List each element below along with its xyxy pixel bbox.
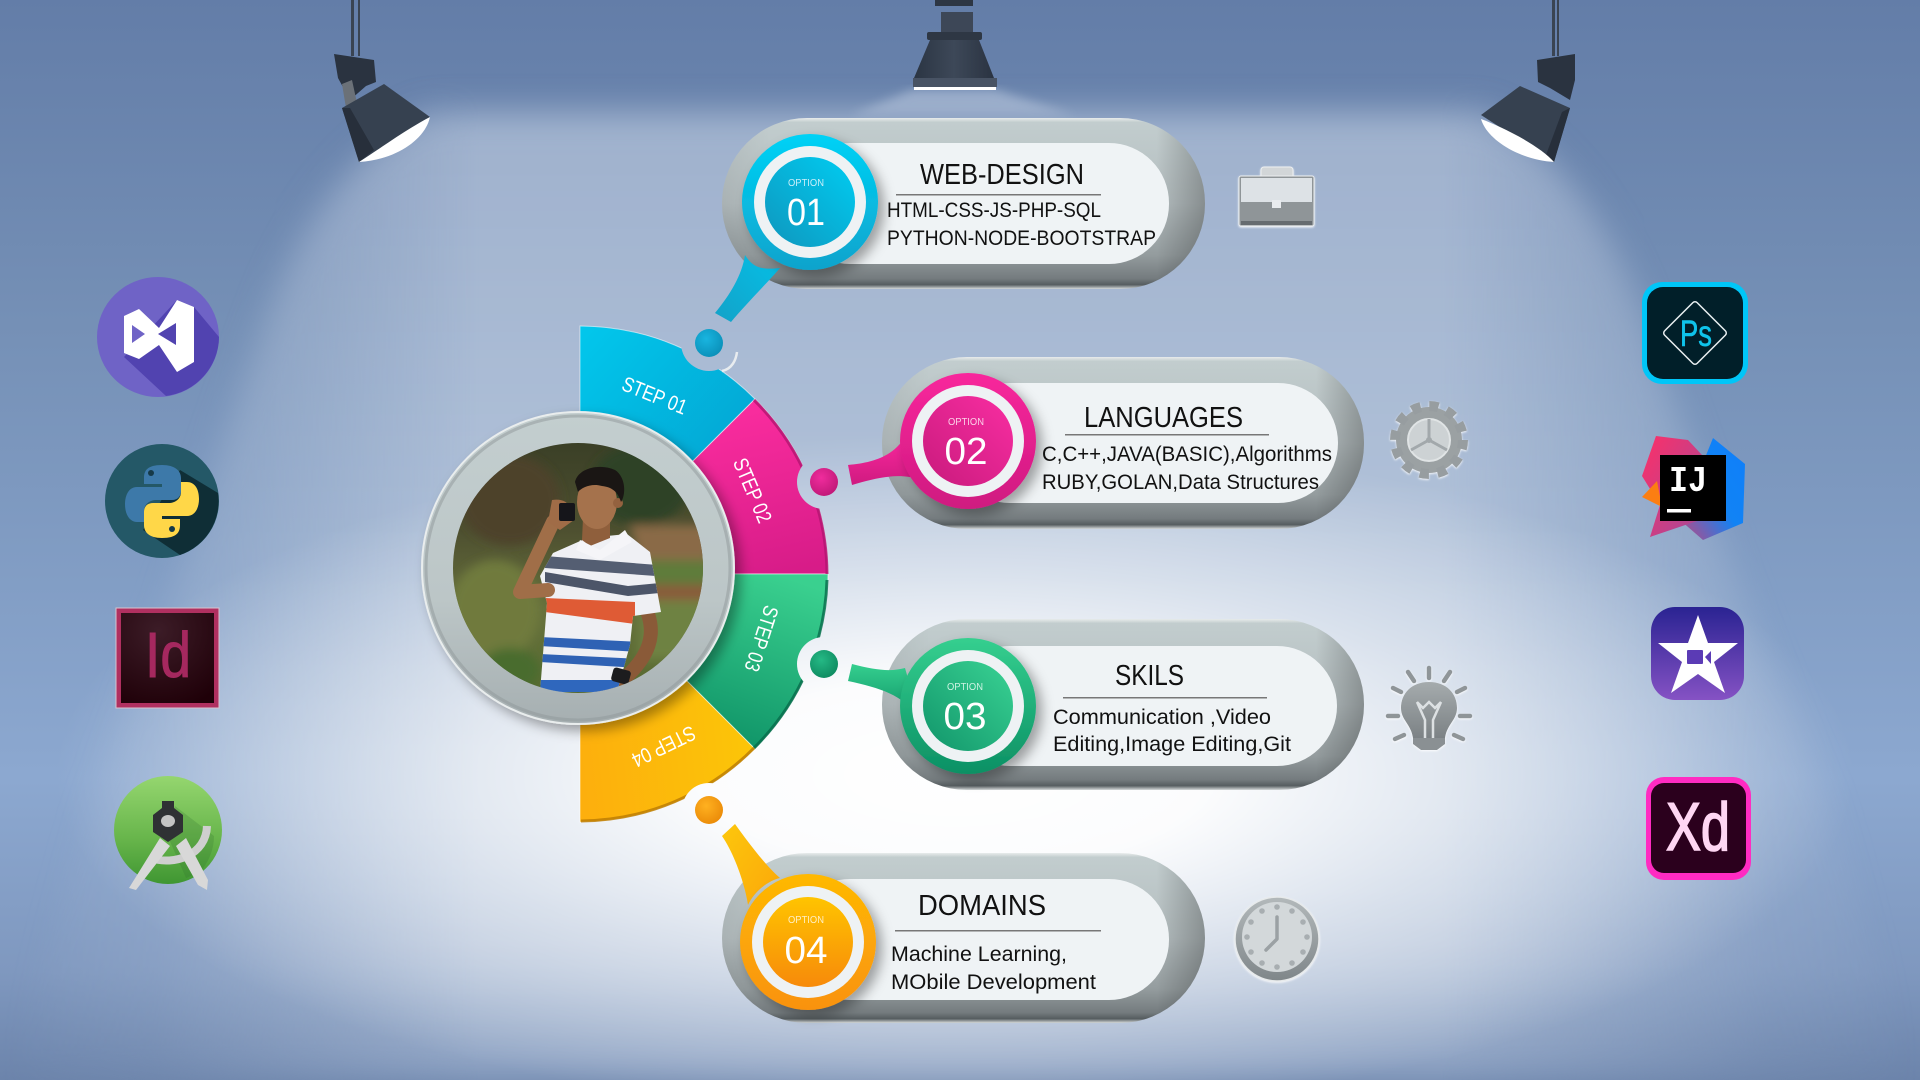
left icon: Visual Studio xyxy=(97,277,219,397)
heading: WEB-DESIGN xyxy=(920,159,1084,191)
left icon: InDesign xyxy=(116,608,219,708)
skills list xyxy=(887,199,1156,250)
badge 04 xyxy=(740,874,876,1010)
badge 01: OPTION xyxy=(788,178,824,189)
left icon: Python xyxy=(105,444,219,558)
skills list: C,C++,JAVA(BASIC),Algorithms xyxy=(1042,443,1332,466)
skills list xyxy=(891,943,1096,994)
panel: option 04 domains xyxy=(722,824,1205,1023)
panel: option 01 web-design xyxy=(715,118,1205,322)
dot 4 xyxy=(695,796,723,824)
right icon: IntelliJ IDEA xyxy=(1642,436,1745,540)
badge 01: 01 xyxy=(787,192,825,234)
outer bevel edge xyxy=(581,400,827,821)
badge handle xyxy=(715,255,780,322)
badge 02 xyxy=(900,373,1036,509)
icon: light bulb xyxy=(1388,668,1470,750)
icon: clock xyxy=(1235,897,1319,981)
badge handle xyxy=(848,440,920,485)
left icon: InDesign: Id xyxy=(145,619,191,691)
shirt xyxy=(540,534,661,692)
segment: step 02 xyxy=(692,398,828,574)
wheel segments xyxy=(580,326,828,822)
label: step 04: STEP 04 xyxy=(628,721,699,771)
right icon: IntelliJ IDEA: IJ xyxy=(1669,461,1707,502)
icon: briefcase xyxy=(1239,167,1314,226)
skills list: Communication ,Video xyxy=(1053,706,1271,729)
dot 1 xyxy=(695,329,723,357)
right icon: Photoshop Express xyxy=(1642,282,1748,384)
skills list: PYTHON-NODE-BOOTSTRAP xyxy=(887,227,1156,250)
hair xyxy=(575,467,624,502)
badge 03: 03 xyxy=(944,696,986,738)
skills list: RUBY,GOLAN,Data Structures xyxy=(1042,471,1319,494)
heading: SKILS xyxy=(1115,660,1184,692)
watch xyxy=(611,668,631,684)
skills list: MObile Development xyxy=(891,971,1096,994)
left icon: Android Studio xyxy=(114,776,222,890)
skills list: HTML-CSS-JS-PHP-SQL xyxy=(887,199,1101,222)
spotlight left xyxy=(334,0,430,162)
heading: LANGUAGES xyxy=(1084,402,1243,434)
badge 02: 02 xyxy=(944,431,988,473)
right icon: iMovie xyxy=(1651,607,1744,700)
right icon: Adobe XD: Xd xyxy=(1666,789,1730,865)
hand and phone xyxy=(548,500,574,530)
label: step 02: STEP 02 xyxy=(728,455,776,526)
spotlight centre xyxy=(913,0,997,90)
panel: option 03 skills xyxy=(848,619,1364,790)
step wheel xyxy=(580,326,838,824)
segment: step 01 xyxy=(580,326,756,461)
badge 01 xyxy=(742,134,878,270)
badge handle xyxy=(848,664,920,720)
dot 3 xyxy=(810,650,838,678)
left arm xyxy=(520,522,553,592)
badge 03: OPTION xyxy=(947,682,983,693)
badge 04: OPTION xyxy=(788,915,824,926)
collar xyxy=(580,530,628,546)
right arm xyxy=(600,614,651,690)
heading: DOMAINS xyxy=(918,890,1046,922)
skills list xyxy=(1053,706,1291,756)
badge handle xyxy=(722,824,780,905)
skills list xyxy=(1042,443,1332,494)
profile photo ring xyxy=(422,412,734,724)
right icon: Adobe XD xyxy=(1646,777,1751,880)
icon: gear xyxy=(1395,406,1463,474)
segment: step 03 xyxy=(687,574,828,749)
neck xyxy=(582,521,610,546)
badge 04: 04 xyxy=(784,930,828,972)
label: step 01: STEP 01 xyxy=(619,373,690,420)
photo: man on phone xyxy=(450,440,710,700)
badge 03 xyxy=(900,638,1036,774)
badge 02: OPTION xyxy=(948,417,984,428)
panel: option 02 languages xyxy=(848,357,1364,529)
skills list: Editing,Image Editing,Git xyxy=(1053,733,1291,756)
head xyxy=(577,485,617,529)
label: step 03: STEP 03 xyxy=(739,602,782,674)
right icon: Photoshop Express: Ps xyxy=(1680,313,1712,354)
notch highlight xyxy=(722,352,737,371)
segment: step 04 xyxy=(580,680,755,822)
spotlight right xyxy=(1481,0,1575,162)
skills list: Machine Learning, xyxy=(891,943,1067,966)
dot 2 xyxy=(810,468,838,496)
